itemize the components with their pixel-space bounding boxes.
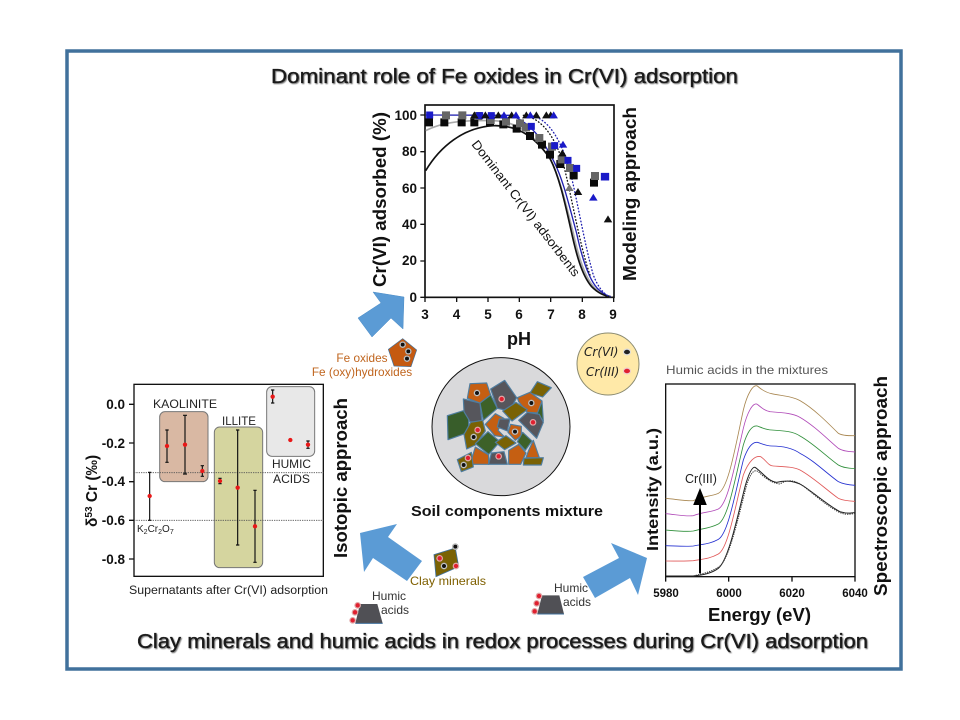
icon: humic acids left: Humic: [372, 589, 406, 603]
y axis title: Intensity (a.u.): [645, 428, 662, 551]
chart: isotopic approach: K: [137, 524, 144, 535]
plot area: [129, 384, 323, 576]
x axis title: pH: [507, 329, 531, 349]
chart: isotopic approach: [84, 384, 351, 597]
chart: isotopic approach: 2: [144, 529, 148, 536]
icon: Fe oxides: Fe oxides: [336, 351, 388, 365]
x tick labels: 4: [453, 307, 461, 322]
means: [147, 394, 310, 528]
icon: humic acids left: acids: [381, 603, 409, 617]
y tick labels: 20: [402, 253, 417, 268]
title: bottom: Clay minerals and humic acids in redox processes during Cr(VI) adsorption: [137, 631, 868, 653]
legend: Cr(VI), Cr(III): Cr(VI): [584, 345, 618, 359]
icon: clay minerals: [410, 543, 486, 588]
y tick labels: 0: [409, 290, 417, 305]
right label: Modeling approach: [620, 107, 640, 281]
chart: isotopic approach: HUMIC: [272, 457, 311, 471]
error bars: [148, 390, 310, 562]
group labels: KAOLINITE: [153, 397, 217, 411]
icon: Fe oxides: [312, 339, 417, 379]
y tick labels: 80: [402, 144, 417, 159]
title: top: Dominant role of Fe oxides in Cr(VI) adsorption: [271, 66, 738, 88]
chart: isotopic approach: 7: [170, 529, 174, 536]
y tick labels: 0.0: [106, 397, 125, 412]
x tick labels: 3: [421, 307, 429, 322]
chart: isotopic approach: O: [162, 524, 170, 535]
y tick labels: -0.2: [102, 436, 125, 451]
x axis title: Energy (eV): [708, 605, 811, 625]
y axis title: δ: [84, 518, 101, 527]
y tick labels: -0.8: [102, 552, 125, 567]
x tick labels: 5980: [653, 588, 679, 600]
adsorbents label: Dominant Cr(VI) adsorbents: [469, 138, 583, 279]
chart: isotopic approach: 2: [158, 529, 162, 536]
x tick labels: 6040: [842, 588, 868, 600]
x tick labels: 6: [515, 307, 523, 322]
legend: Cr(VI), Cr(III): Cr(III): [586, 365, 619, 379]
arrow: Cr(III): [695, 491, 705, 573]
data: black squares: [426, 119, 597, 186]
spectra: [666, 386, 855, 501]
chart: isotopic approach: ILLITE: [222, 414, 256, 428]
y axis title: Cr(VI) adsorbed (%): [370, 112, 390, 287]
x tick labels: 6020: [779, 588, 805, 600]
x tick labels: 8: [578, 307, 586, 322]
chart: isotopic approach: ACIDS: [273, 472, 310, 486]
x tick labels: 6000: [716, 588, 742, 600]
x tick labels: [653, 588, 868, 600]
arrow: to isotopic chart: [360, 524, 422, 581]
x tick labels: 7: [547, 307, 555, 322]
x caption: Supernatants after Cr(VI) adsorption: [129, 585, 328, 597]
arrow: to modeling chart: [358, 292, 404, 337]
y tick labels: [394, 108, 417, 305]
icon: humic acids left: [349, 589, 409, 624]
soil components mixture: [411, 358, 603, 520]
data: triangles: [471, 112, 612, 222]
right label: Spectroscopic approach: [870, 376, 891, 596]
icon: clay minerals: Clay minerals: [410, 574, 486, 588]
icon: humic acids right: [531, 581, 591, 615]
legend: Cr(VI), Cr(III): [577, 333, 639, 395]
x tick labels: 9: [609, 307, 617, 322]
model curves: [426, 115, 611, 297]
outer frame: [67, 51, 901, 669]
data: blue squares: [427, 112, 609, 180]
x tick labels: 5: [484, 307, 492, 322]
soil components mixture: Soil components mixture: [411, 503, 603, 520]
Cr(III) label: Cr(III): [685, 472, 717, 486]
y tick labels: [102, 397, 125, 567]
y tick labels: -0.4: [102, 474, 125, 489]
icon: humic acids right: Humic: [554, 581, 588, 595]
x tick labels: [421, 307, 617, 322]
y axis title: Cr (‰): [84, 455, 101, 506]
icon: Fe oxides: Fe (oxy)hydroxides: [312, 365, 412, 379]
y tick labels: 60: [402, 181, 417, 196]
plot area: [666, 384, 855, 582]
arrow: to spectroscopic chart: [583, 543, 647, 598]
data: gray squares: [443, 112, 598, 179]
chart heading: Humic acids in the mixtures: [666, 363, 828, 377]
y axis title: 53: [84, 506, 95, 518]
y tick labels: -0.6: [102, 513, 125, 528]
plot area: [420, 105, 614, 302]
icon: humic acids right: acids: [563, 595, 591, 609]
chart: isotopic approach: Cr: [148, 524, 159, 535]
right label: Isotopic approach: [331, 398, 351, 558]
chart: modeling approach: [370, 105, 640, 349]
y tick labels: 100: [394, 108, 417, 123]
y tick labels: 40: [402, 217, 417, 232]
chart: spectroscopic approach: [645, 363, 891, 625]
